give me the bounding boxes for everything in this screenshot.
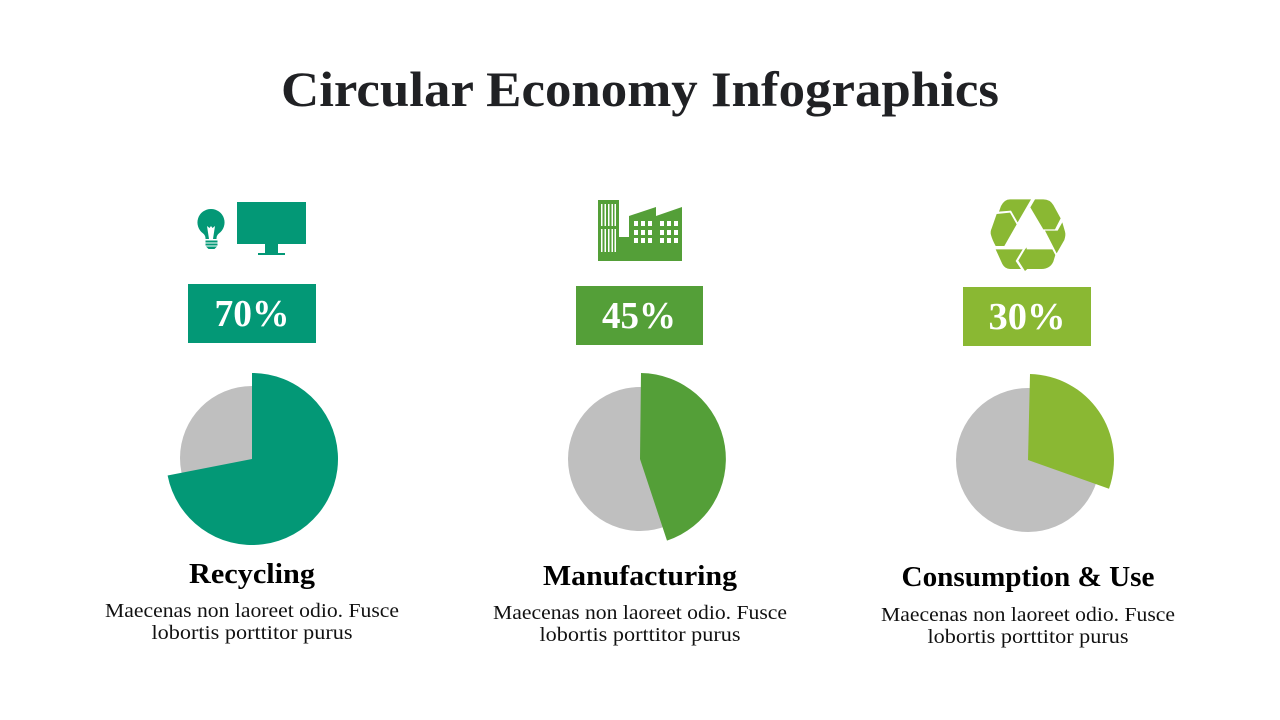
percentage badge: 30%: 30% — [988, 296, 1066, 338]
text block: recycling: lobortis porttitor purus — [152, 622, 353, 644]
percentage badge: 45% — [576, 286, 703, 345]
heading: manufacturing: Manufacturing — [543, 561, 737, 592]
text block: recycling — [105, 600, 399, 644]
percentage badge: 45%: 45% — [602, 295, 676, 337]
heading: consumption and use: Consumption & Use — [902, 562, 1154, 593]
text block: consumption and use: Maecenas non laoreet odio. Fusce — [881, 604, 1175, 626]
icon: light bulb and monitor — [197, 202, 306, 255]
percentage badge: 70% — [188, 284, 316, 343]
panel: recycling — [105, 202, 399, 644]
heading: recycling: Recycling — [189, 559, 315, 590]
text block: consumption and use: lobortis porttitor purus — [928, 626, 1129, 648]
text block: manufacturing: Maecenas non laoreet odio. Fusce — [493, 602, 787, 624]
text block: recycling: Maecenas non laoreet odio. Fusce — [105, 600, 399, 622]
percentage badge: 70%: 70% — [214, 293, 290, 335]
text block: manufacturing: lobortis porttitor purus — [540, 624, 741, 646]
text block: consumption and use — [881, 604, 1175, 648]
panel: manufacturing — [493, 200, 787, 646]
icon: recycle arrows — [991, 199, 1065, 271]
icon: factory — [598, 200, 682, 261]
pie chart: 30% — [956, 374, 1114, 532]
pie chart: 70% — [168, 373, 338, 545]
text block: manufacturing — [493, 602, 787, 646]
percentage badge: 30% — [963, 287, 1091, 346]
panel: consumption and use — [881, 199, 1175, 648]
pie chart: 45% — [568, 373, 726, 541]
title: Circular Economy Infographics — [281, 61, 999, 117]
